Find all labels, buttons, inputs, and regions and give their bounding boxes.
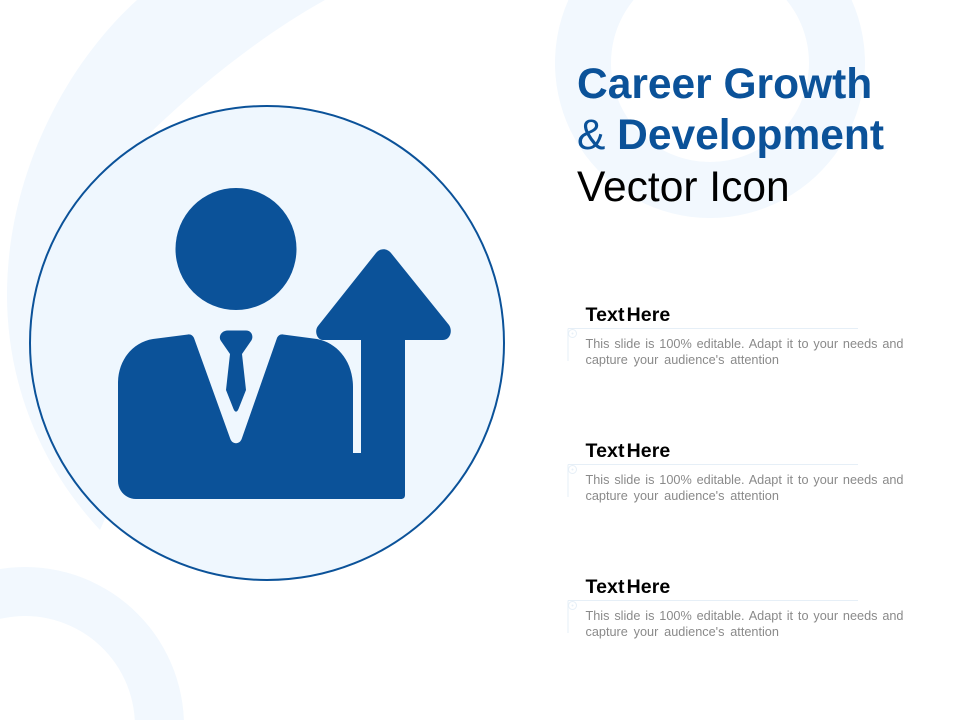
text block 2: This slide is 100% editable. Adapt it to your needs and bbox=[586, 473, 904, 487]
text block 3: capture your audience's attention bbox=[586, 625, 779, 639]
ring: top right bbox=[555, 0, 865, 218]
text block 1: capture your audience's attention bbox=[586, 353, 779, 367]
ring: bottom left bbox=[0, 567, 184, 720]
text block 2 bbox=[568, 440, 904, 503]
icon: head bbox=[176, 188, 296, 310]
title: Vector Icon bbox=[577, 164, 790, 210]
text block 2: capture your audience's attention bbox=[586, 489, 779, 503]
text block 1: This slide is 100% editable. Adapt it to your needs and bbox=[586, 337, 904, 351]
text block 1: Text Here bbox=[586, 304, 670, 326]
text block 2: Text Here bbox=[586, 440, 670, 462]
text block 3 bbox=[568, 576, 904, 639]
text block 1 bbox=[568, 304, 904, 367]
text block 3: Text Here bbox=[586, 576, 670, 598]
main circle with career growth icon bbox=[30, 106, 504, 580]
title: Career Growth bbox=[577, 60, 872, 108]
title bbox=[577, 60, 884, 210]
title: & Development bbox=[577, 112, 884, 159]
swoosh: top left bbox=[7, 0, 325, 530]
text block 3: This slide is 100% editable. Adapt it to your needs and bbox=[586, 609, 904, 623]
icon: suit body and rising arrow bbox=[118, 249, 451, 499]
circle outline bbox=[30, 106, 504, 580]
icon: tie bbox=[220, 330, 252, 412]
